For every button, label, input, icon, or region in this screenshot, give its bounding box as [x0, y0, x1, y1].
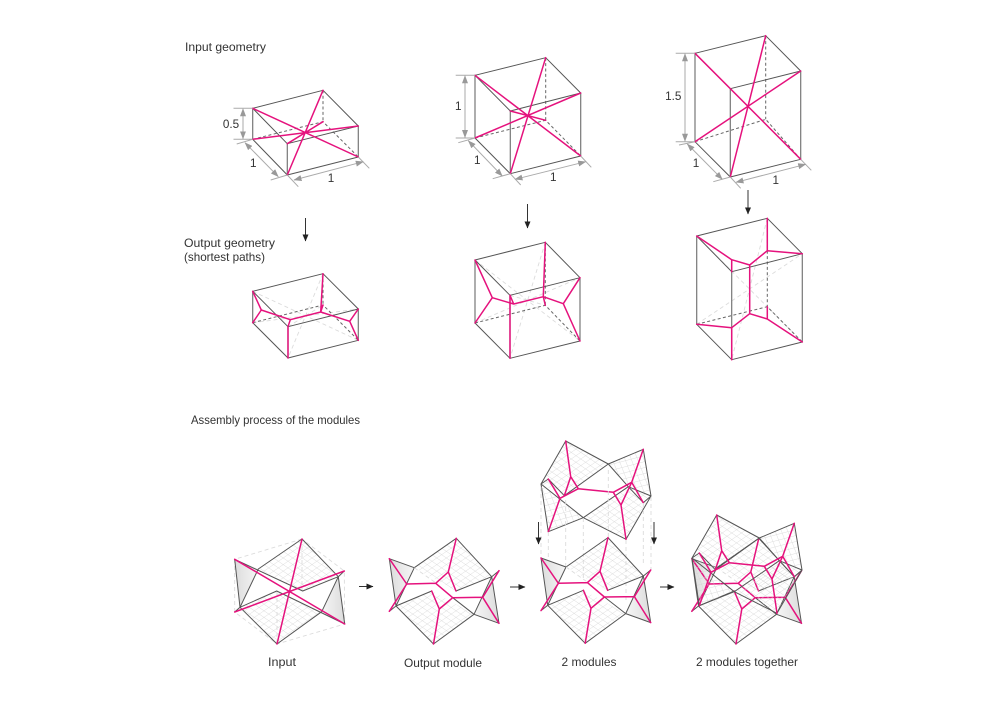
- output box: height 1.5: [697, 218, 802, 360]
- output box: height 0.5: [253, 274, 358, 358]
- input box: height 1: 1: [474, 154, 481, 167]
- arrow: left drop: [538, 522, 540, 544]
- input box: height 1.5: 1: [693, 157, 699, 170]
- input box: height 1.5: [665, 36, 811, 188]
- assembly step: 2 modules: [538, 441, 654, 643]
- input box: height 0.5: 0.5: [223, 118, 240, 131]
- label: input: Input: [268, 656, 297, 669]
- heading: assembly process: Assembly process of the modules: [191, 414, 360, 427]
- arrow: right drop: [653, 522, 655, 544]
- heading: input geometry: Input geometry: [185, 41, 266, 54]
- arrow: box 1 down: [304, 218, 306, 241]
- input box: height 1: 1: [455, 100, 462, 113]
- arrow: box 3 down: [747, 190, 749, 214]
- output box: height 1: [475, 242, 580, 358]
- heading: output geometry: [184, 237, 275, 264]
- assembly step: input: [235, 539, 345, 644]
- label: 2 modules together: 2 modules together: [696, 656, 798, 669]
- input box: height 1: 1: [550, 171, 557, 184]
- lower module: [541, 538, 651, 643]
- input box: height 0.5: [223, 90, 369, 187]
- arrow: 2 modules to together: [660, 586, 674, 588]
- label: output module: Output module: [404, 657, 482, 670]
- input box: height 0.5: 1: [250, 157, 257, 170]
- input box: height 1.5: 1: [772, 174, 779, 187]
- upper module: [541, 441, 651, 539]
- input box: height 1.5: 1.5: [665, 90, 682, 103]
- arrow: box 2 down: [526, 204, 528, 228]
- arrow: input to output module: [359, 586, 373, 588]
- assembly step: 2 modules together: [692, 515, 802, 644]
- assembly step: output module: [389, 538, 499, 644]
- input box: height 0.5: 1: [328, 172, 334, 185]
- arrow: output module to 2 modules: [510, 586, 525, 588]
- input box: height 1: [455, 58, 591, 185]
- label: 2 modules: 2 modules: [562, 656, 617, 669]
- alignment guides: [541, 470, 651, 600]
- heading: output geometry: Output geometry: [184, 237, 275, 250]
- heading: output geometry: (shortest paths): [184, 251, 265, 264]
